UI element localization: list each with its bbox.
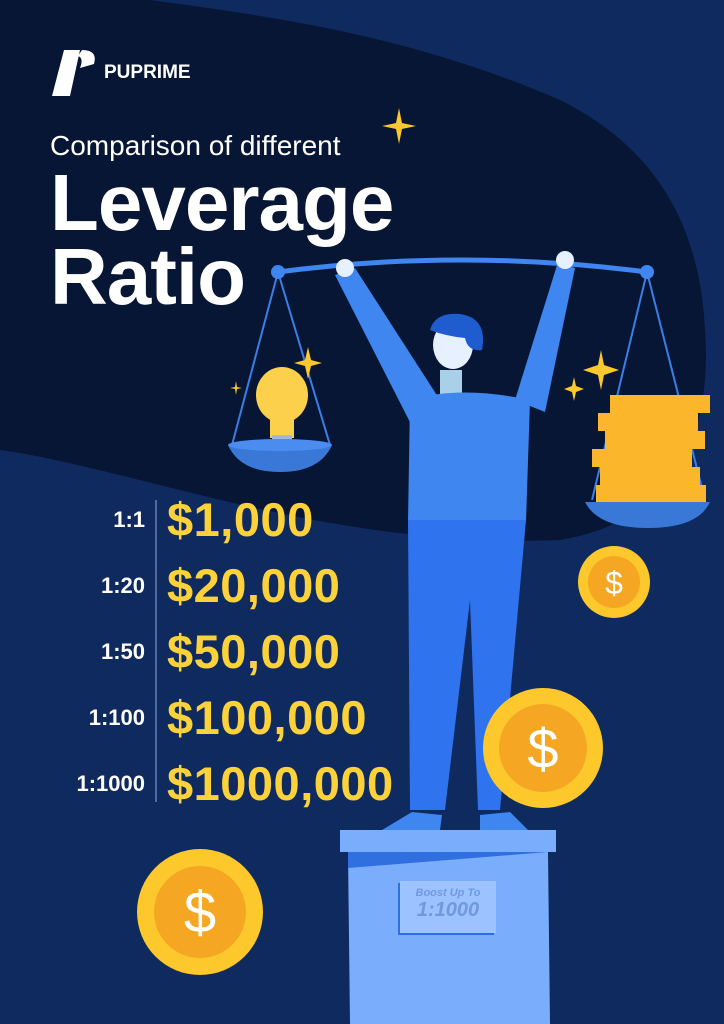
ratio table: $1,000	[167, 493, 314, 546]
ratio table: 1:50	[101, 639, 145, 664]
title: Leverage	[50, 158, 393, 247]
logo	[52, 50, 191, 96]
ratio table	[76, 493, 394, 810]
icon: sparkle title	[382, 108, 416, 144]
coins stack	[592, 395, 710, 503]
torso	[408, 392, 530, 522]
ratio table: $50,000	[167, 625, 340, 678]
ratio table: 1:1000	[76, 771, 145, 796]
ratio table: $20,000	[167, 559, 340, 612]
head	[440, 370, 462, 395]
arms	[335, 268, 440, 432]
title: Ratio	[50, 232, 245, 321]
sparkles	[230, 347, 619, 401]
label: pedestal sign: Boost Up To	[416, 887, 480, 899]
title	[50, 130, 393, 321]
legs	[408, 520, 526, 810]
bulb	[256, 367, 308, 423]
label: pedestal sign	[400, 881, 496, 933]
ratio table: $100,000	[167, 691, 367, 744]
ratio table: 1:20	[101, 573, 145, 598]
ratio table: $1000,000	[167, 757, 394, 810]
coins: $	[527, 717, 559, 780]
ratio table: 1:1	[113, 507, 145, 532]
ratio table: 1:100	[89, 705, 145, 730]
logo: PUPRIME	[104, 62, 191, 83]
label: pedestal sign: 1:1000	[417, 899, 479, 921]
title: Comparison of different	[50, 130, 341, 161]
feet	[382, 812, 442, 830]
pedestal	[340, 830, 556, 852]
coins: $	[605, 565, 623, 601]
coins: $	[184, 880, 216, 945]
